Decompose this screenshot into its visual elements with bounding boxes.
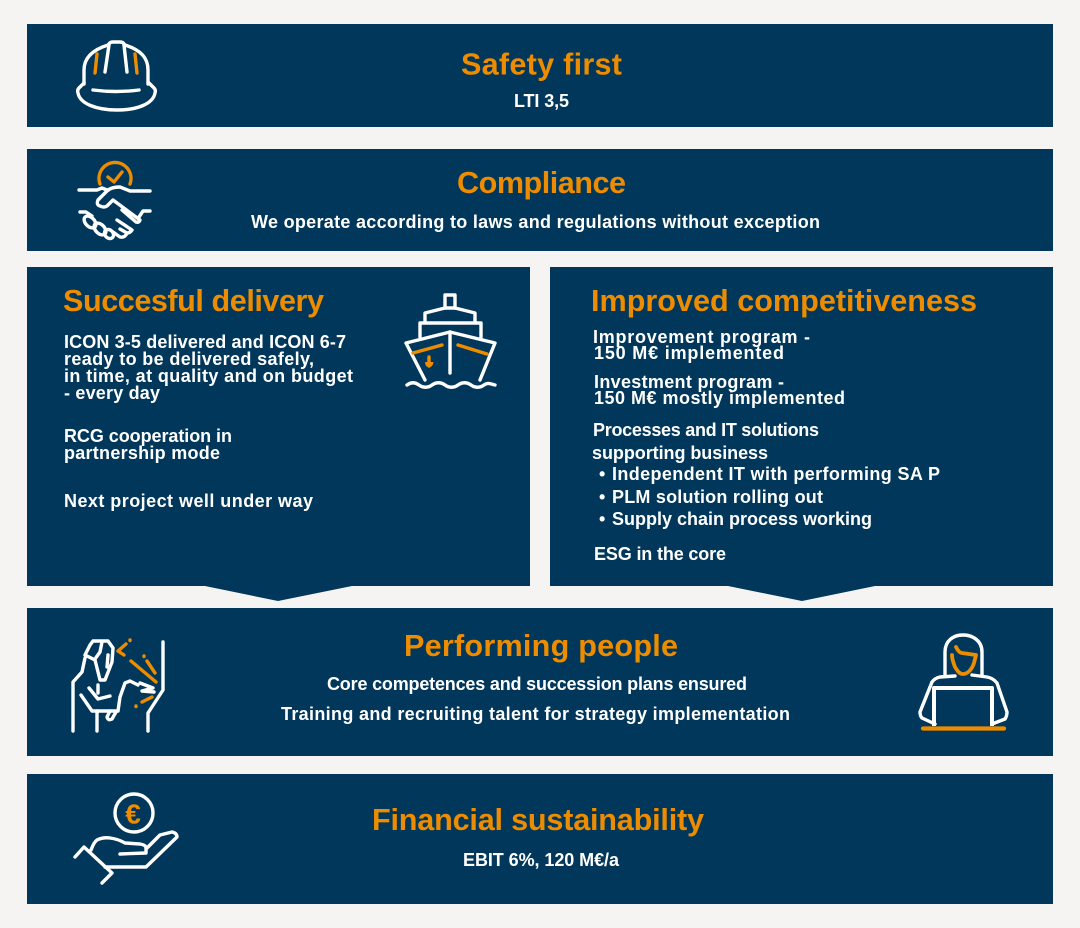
panel: performing people — [27, 608, 1053, 756]
text: processes and IT solutions: supporting business — [592, 443, 768, 463]
heading: successful delivery: Succesful delivery — [63, 284, 324, 318]
text: LTI: LTI 3,5 — [514, 91, 569, 111]
heading: compliance: Compliance — [457, 166, 626, 200]
text: processes and IT solutions — [592, 420, 819, 463]
icon: person at laptop — [920, 635, 1007, 728]
text: delivery status: ICON 3-5 delivered and ICON 6-7 — [64, 332, 346, 352]
panel: improved competitiveness — [550, 267, 1053, 601]
icon: hard hat — [78, 42, 155, 110]
list: process bullets: Independent IT with performing SA P — [612, 464, 940, 484]
icon: euro sign: € — [125, 798, 141, 830]
heading: performing people: Performing people — [404, 629, 678, 663]
text: delivery status: ready to be delivered safely, — [64, 349, 314, 369]
icon: handshake with check — [79, 162, 150, 240]
text: next project: Next project well under way — [64, 491, 313, 511]
panel: safety first — [27, 24, 1053, 127]
text: RCG cooperation: partnership mode — [64, 443, 220, 463]
list: process bullets: Supply chain process working — [612, 509, 872, 529]
heading: financial sustainability: Financial sustainability — [372, 803, 704, 837]
text: RCG cooperation — [64, 426, 232, 463]
text: improvement program: Improvement program - — [593, 327, 810, 347]
text: core competences: Core competences and succession plans ensured — [327, 674, 747, 694]
text: delivery status: - every day — [64, 383, 160, 403]
panel: successful delivery — [27, 267, 530, 601]
text: ESG: ESG in the core — [594, 544, 726, 564]
text: compliance statement: We operate according to laws and regulations without exception — [251, 212, 820, 232]
text: investment program: Investment program - — [594, 372, 784, 392]
text: delivery status: in time, at quality and on budget — [64, 366, 353, 386]
heading: safety first: Safety first — [461, 48, 622, 82]
text: EBIT: EBIT 6%, 120 M€/a — [463, 850, 620, 870]
text: investment program: 150 M€ mostly implemented — [594, 388, 845, 408]
text: training: Training and recruiting talent for strategy implementation — [281, 704, 790, 724]
list: process bullets — [599, 464, 940, 529]
icon: welder — [73, 640, 163, 731]
list: process bullets: • — [599, 464, 605, 484]
text: investment program — [594, 372, 845, 408]
panel: financial sustainability — [27, 774, 1053, 904]
heading: improved competitiveness: Improved competitiveness — [591, 284, 977, 318]
icon: hand holding euro coin — [75, 794, 177, 883]
text: improvement program — [593, 327, 810, 363]
list: process bullets: PLM solution rolling out — [612, 487, 823, 507]
list: process bullets: • — [599, 487, 605, 507]
text: processes and IT solutions: Processes and IT solutions — [593, 420, 819, 440]
text: RCG cooperation: RCG cooperation in — [64, 426, 232, 446]
panel: compliance — [27, 149, 1053, 251]
text: improvement program: 150 M€ implemented — [594, 343, 784, 363]
list: process bullets: • — [599, 509, 605, 529]
icon: ship — [406, 295, 495, 387]
text: delivery status — [64, 332, 353, 403]
